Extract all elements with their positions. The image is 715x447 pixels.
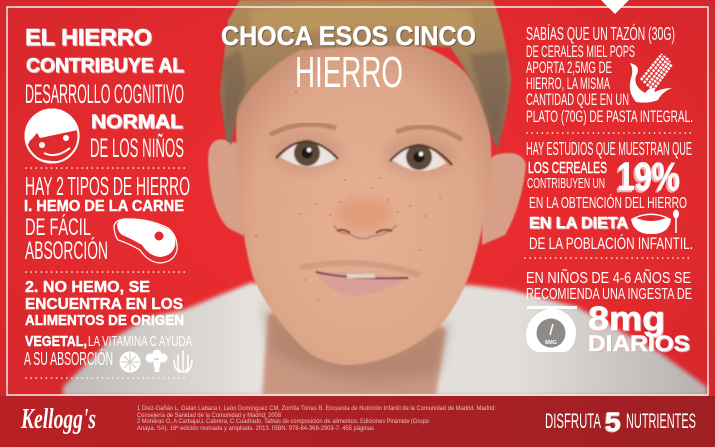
icon: hand-shaped plant bbox=[174, 351, 192, 372]
freckles bbox=[255, 91, 441, 301]
nose colour bbox=[336, 198, 392, 230]
heading: en la dieta: EN LA DIETA bbox=[529, 215, 628, 232]
text: sabías que: HIERRO, LA MISMA bbox=[526, 74, 610, 93]
slogan: disfruta 5 nutrientes: 5 bbox=[605, 407, 621, 437]
panel: left column, iron facts: DE LOS NIÑOS bbox=[90, 132, 184, 163]
text: a su absorción: A SU ABSORCIÓN bbox=[24, 348, 113, 369]
chin shadow bbox=[262, 300, 450, 380]
slogan: disfruta 5 nutrientes: DISFRUTA bbox=[545, 410, 601, 433]
icon: steak bbox=[114, 219, 177, 263]
text: hay 2 tipos de hierro: HAY 2 TIPOS DE HIERRO bbox=[25, 171, 190, 201]
text: DESARROLLO COGNITIVO bbox=[25, 79, 184, 109]
footnotes bbox=[137, 406, 496, 432]
eye socket shading bbox=[271, 132, 456, 175]
photo: boy's portrait bbox=[63, 0, 707, 396]
right eye bbox=[390, 144, 452, 171]
eyebrows bbox=[270, 124, 336, 135]
panel: left column, iron facts bbox=[24, 24, 192, 378]
footer bbox=[20, 403, 696, 437]
neck bbox=[262, 300, 446, 396]
hair highlight bbox=[250, 3, 475, 40]
icon: smiling child bbox=[24, 108, 80, 164]
footnotes: Consejería de Sanidad de la Comunidad y Madrid; 2008 bbox=[137, 413, 282, 419]
text: sabías que: CANTIDAD QUE EN UN bbox=[526, 90, 629, 109]
heading: encuentra en los: ENCUENTRA EN LOS bbox=[25, 296, 183, 313]
left eye bbox=[276, 140, 338, 167]
icon: citrus slice bbox=[120, 352, 140, 372]
mouth bbox=[300, 263, 420, 296]
title bbox=[221, 21, 476, 97]
text: la vitamina c ayuda: LA VITAMINA C AYUDA bbox=[88, 333, 192, 350]
heading: normal: NORMAL bbox=[91, 111, 183, 133]
right ear bbox=[482, 153, 526, 245]
statistic: 8mg: 8mg bbox=[588, 300, 665, 338]
heading: no hemo, se: 2. NO HEMO, SE bbox=[25, 279, 150, 296]
icon: spoon bbox=[673, 210, 679, 233]
statistic: 19 percent: 19% bbox=[617, 155, 680, 199]
text: de fácil: DE FÁCIL bbox=[25, 214, 91, 241]
icon: broccoli bbox=[146, 350, 168, 372]
subheading: hierro: HIERRO bbox=[295, 48, 403, 97]
shirt bbox=[63, 283, 707, 396]
heading: choca esos cinco: CHOCA ESOS CINCO bbox=[221, 21, 476, 51]
slogan: disfruta 5 nutrientes bbox=[545, 407, 696, 437]
panel: right column, cereal facts bbox=[525, 23, 693, 356]
icon: kitchen scale: 8MG bbox=[545, 340, 557, 346]
text: sabías que bbox=[526, 23, 693, 126]
icon: cereal bowl bbox=[631, 214, 671, 234]
heading: contribuye al: CONTRIBUYE AL bbox=[26, 55, 184, 77]
footnotes: 1 Díez-Gañán L, Galán Labaca I, León Domínguez CM, Zorrilla Torras B. Encuesta de Nutrición Infantil de la Comunidad de Madrid. Madrid: bbox=[137, 406, 496, 412]
icon: corn cob bbox=[630, 54, 672, 103]
text: absorción: ABSORCIÓN bbox=[25, 236, 108, 265]
icon: kitchen scale bbox=[526, 306, 577, 352]
footnotes: 2 Moreiras O, A Carbajal,L Cabrera, C Cuadrado. Tablas de composición de alimentos. Ediciones Pirámide (Grupo bbox=[137, 419, 430, 425]
text: los cereales: LOS CEREALES bbox=[528, 160, 607, 177]
hair bbox=[220, 0, 511, 150]
footnotes: Anaya, SA). 16ª edición revisada y ampliada. 2013. ISBN: 978-84-368-2903-7. 455 páginas bbox=[137, 425, 374, 432]
text: contribuyen un: CONTRIBUYEN UN bbox=[527, 175, 605, 192]
logo: kellogg's: Kellogg's bbox=[20, 403, 96, 435]
nose bbox=[334, 225, 397, 239]
heading: vegetal: VEGETAL, bbox=[25, 334, 87, 350]
heading: el hierro: EL HIERRO bbox=[25, 24, 152, 50]
heading: hemo de la carne: I. HEMO DE LA CARNE bbox=[24, 198, 184, 215]
footer band bbox=[0, 396, 715, 447]
top-right notch arrow bbox=[601, 0, 629, 14]
heading: alimentos de origen: ALIMENTOS DE ORIGEN bbox=[25, 313, 184, 329]
left ear bbox=[208, 139, 244, 236]
text: sabías que: APORTA 2,5MG DE bbox=[526, 58, 612, 77]
hair side shading bbox=[222, 50, 508, 140]
face bbox=[236, 36, 491, 365]
heading: diarios: DIARIOS bbox=[588, 331, 690, 356]
